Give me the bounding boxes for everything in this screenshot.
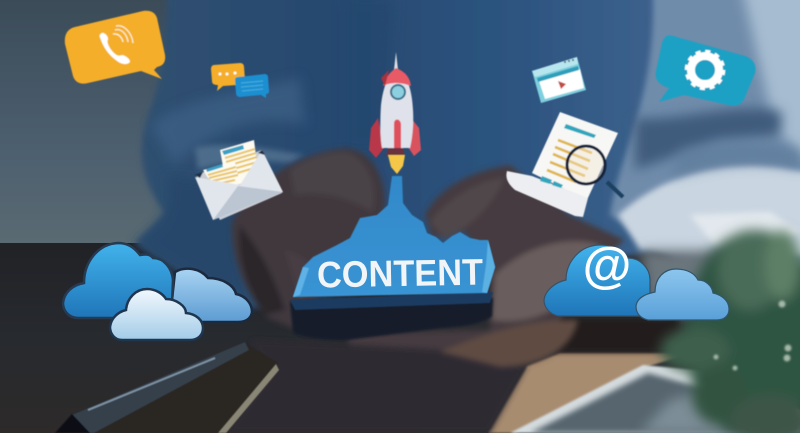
plant xyxy=(660,230,800,433)
shirt torso xyxy=(135,0,680,310)
icon: small chat bubbles xyxy=(211,63,269,98)
table wood xyxy=(488,353,690,433)
documents inside envelope xyxy=(220,140,258,184)
icon: phone speech bubble xyxy=(65,11,165,84)
window light and grey area upper right of plant xyxy=(690,212,800,252)
rocket body xyxy=(380,68,413,148)
desk surface xyxy=(0,243,420,433)
title: CONTENT xyxy=(317,252,484,295)
notebook edge xyxy=(218,364,279,433)
right fin xyxy=(408,118,421,156)
icon: video window xyxy=(532,57,586,103)
at sign: @ xyxy=(583,237,631,293)
right hand xyxy=(345,165,625,367)
wall at left xyxy=(0,0,230,243)
content platform xyxy=(290,176,495,340)
icon: document with magnifier xyxy=(506,112,623,217)
icon: left cloud group xyxy=(63,243,252,340)
envelope front xyxy=(195,150,283,220)
right sleeve xyxy=(610,0,800,270)
tablet on table xyxy=(510,365,800,433)
icon: envelope with documents xyxy=(195,140,283,220)
blue mountain with jagged top and exhaust trail xyxy=(293,176,495,297)
icon: rocket xyxy=(369,52,421,174)
notebook on desk xyxy=(90,345,278,433)
phone base xyxy=(290,298,493,340)
left hand xyxy=(232,148,385,335)
magnifier xyxy=(567,146,605,184)
icon: at-sign cloud group xyxy=(544,237,729,320)
left fin xyxy=(369,118,384,158)
dark jacket body below hands xyxy=(225,340,527,433)
shirt folds xyxy=(150,78,305,165)
pen on desk xyxy=(55,342,249,433)
icon: gear speech bubble xyxy=(656,35,756,106)
